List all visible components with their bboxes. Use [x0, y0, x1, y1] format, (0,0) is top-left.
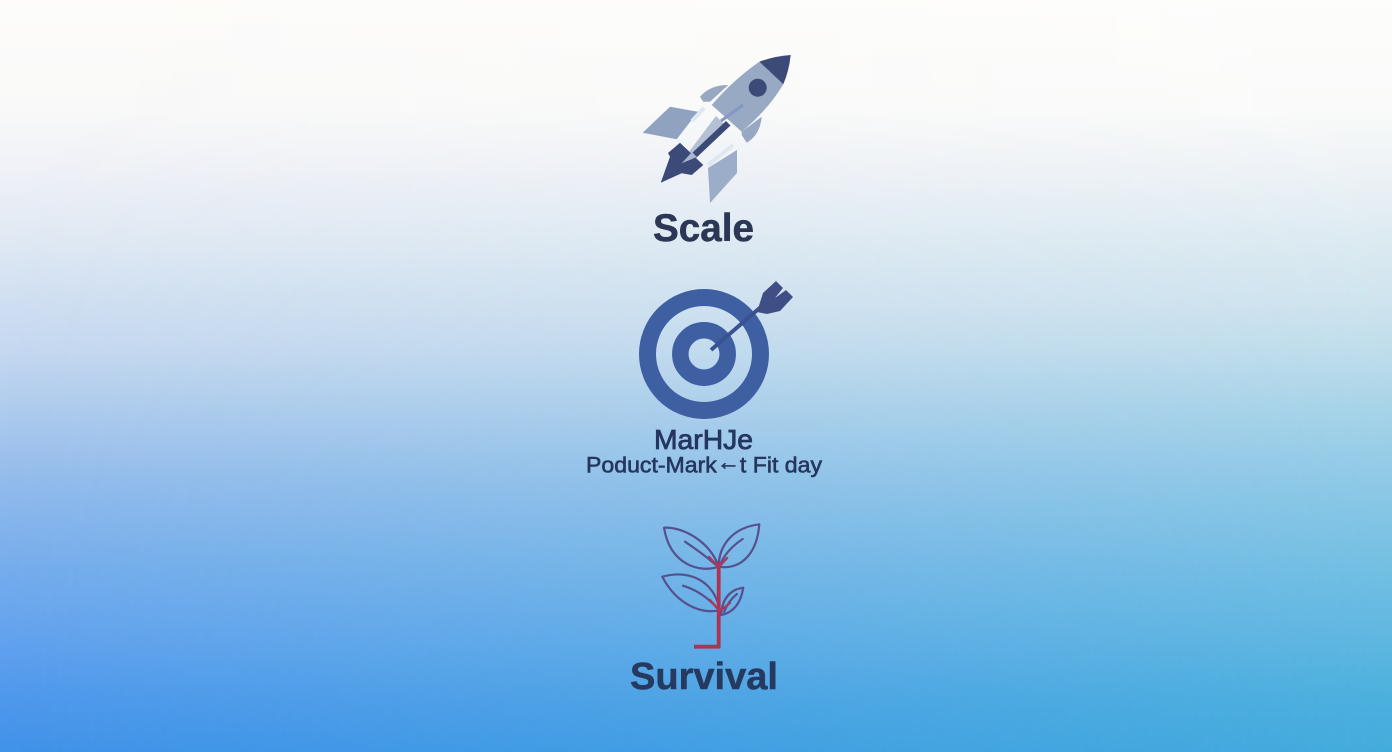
rocket body: [712, 62, 783, 132]
rocket upper side fin: [700, 85, 728, 102]
heading: Scale: Scale: [653, 207, 754, 250]
icon: rocket: [643, 55, 791, 203]
rocket window: [749, 79, 767, 97]
rocket exhaust trail: [682, 116, 724, 161]
rocket nose: [759, 55, 791, 84]
icon: target with arrow: [648, 281, 793, 410]
subheading: product-market fit: Poduct-Mark: [586, 452, 711, 478]
heading: Survival: Survival: [630, 656, 778, 698]
rocket glow streaks: [692, 108, 733, 165]
rocket right fin: [708, 150, 737, 203]
rocket left fin: [643, 107, 698, 139]
arrow fletching: [757, 281, 793, 314]
target rings: [648, 298, 760, 410]
arrow shaft: [711, 306, 762, 350]
rocket centre rod: [690, 121, 730, 159]
rocket lower side fin: [742, 117, 762, 143]
red leaf joints: [709, 557, 730, 611]
rocket thin highlight: [721, 105, 743, 121]
rocket flame highlight: [682, 152, 697, 163]
rocket flame: [661, 143, 703, 183]
subheading: product-market fit: ←: [717, 450, 740, 474]
leaves: [662, 524, 759, 615]
icon: plant sprout: [662, 524, 759, 647]
heading: garbled market label: MarHJe: [654, 424, 753, 455]
subheading: product-market fit: t Fit day: [740, 452, 822, 478]
stem: [694, 562, 719, 647]
